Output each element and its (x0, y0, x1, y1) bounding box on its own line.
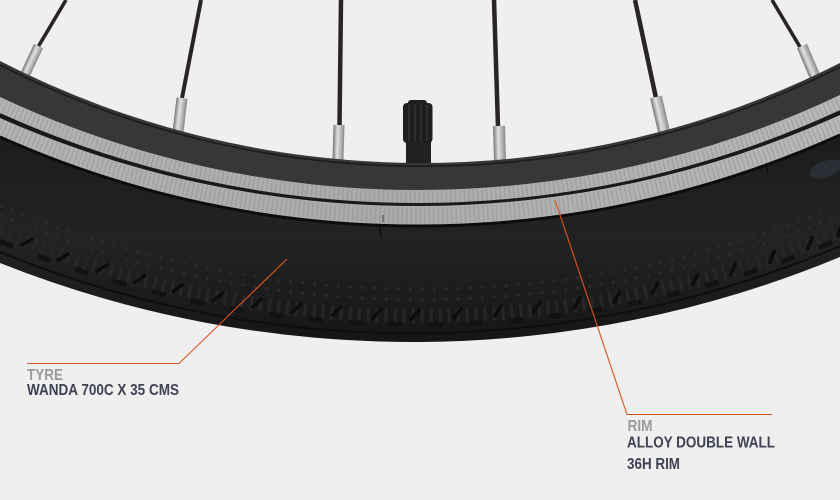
tyre heading: TYRE (27, 367, 63, 384)
spoke 5 (635, 0, 670, 133)
spoke 4 (493, 0, 506, 162)
label: tyre (27, 367, 179, 399)
tyre tread blocks (0, 239, 840, 325)
tyre tread diamonds lower (0, 215, 840, 300)
rim (0, 61, 840, 225)
rim reflective strips (0, 95, 840, 226)
leader line: rim (555, 200, 772, 414)
tyre lower groove (0, 246, 840, 333)
rim heading: RIM (628, 418, 652, 435)
strip upper (0, 95, 840, 203)
rim edge line (0, 65, 840, 166)
groove (0, 113, 840, 205)
tyre (0, 134, 840, 342)
spoke 2 (172, 0, 201, 134)
strip nick (382, 215, 384, 222)
strip lower shadow line (0, 135, 840, 226)
spoke 1 (20, 0, 66, 79)
rim value line 2: 36H RIM (627, 456, 680, 473)
tyre nicks (380, 155, 768, 238)
tyre tread bars (0, 231, 840, 316)
spokes with nipples (20, 0, 820, 162)
rim value line 1: ALLOY DOUBLE WALL (627, 434, 775, 452)
leader line: tyre (27, 259, 287, 364)
icon: valve (403, 100, 432, 166)
tyre value: WANDA 700C X 35 CMS (27, 382, 179, 399)
strip lower (0, 115, 840, 225)
tyre tread slots (22, 224, 840, 320)
spoke 3 (332, 0, 344, 161)
tyre sidewall mark (807, 156, 840, 182)
label: rim (627, 418, 775, 473)
spoke 6 (772, 0, 820, 79)
tyre tread diamonds upper (0, 205, 840, 289)
